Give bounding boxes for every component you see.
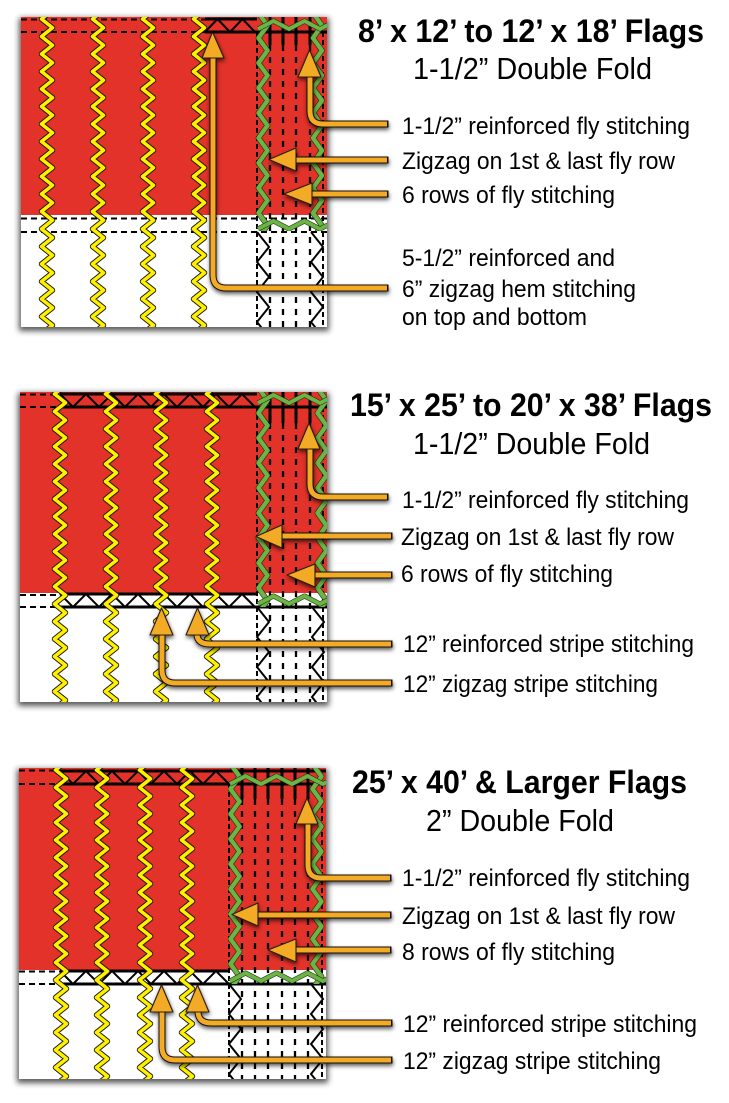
flag diagram 1 [14, 14, 334, 336]
arrow: hem stitching [202, 32, 387, 288]
arrow: reinforced fly stitching [296, 798, 390, 878]
subtitle: 2” Double Fold [426, 803, 614, 838]
label: 1-1/2” reinforced fly stitching [402, 865, 690, 892]
arrow: zigzag on first and last fly row [256, 525, 391, 548]
panel: 8 x 12 to 12 x 18 flags [19, 2, 704, 352]
arrow: zigzag stripe stitching [150, 985, 391, 1060]
label: hem stitching [402, 245, 636, 331]
arrow: zigzag on first and last fly row [269, 148, 387, 171]
label: 1-1/2” reinforced fly stitching [402, 113, 690, 140]
subtitle: 1-1/2” Double Fold [413, 426, 650, 461]
arrow: reinforced stripe stitching [186, 985, 391, 1023]
subtitle: 1-1/2” Double Fold [413, 51, 652, 86]
label: 1-1/2” reinforced fly stitching [402, 487, 689, 514]
title: 25’ x 40’ & Larger Flags [352, 764, 687, 800]
label: 8 rows of fly stitching [402, 939, 615, 966]
arrow: zigzag stripe stitching [150, 608, 391, 683]
flag diagram 2 [14, 388, 334, 710]
label: 6 rows of fly stitching [402, 182, 615, 209]
label: hem stitching: 6” zigzag hem stitching [402, 276, 636, 303]
label: 12” zigzag stripe stitching [403, 1048, 661, 1075]
arrow: reinforced stripe stitching [186, 608, 391, 644]
arrow: rows of fly stitching [287, 564, 391, 587]
arrow: rows of fly stitching [284, 183, 387, 205]
panel: 25 x 40 and larger flags [17, 752, 697, 1102]
label: Zigzag on 1st & last fly row [402, 148, 676, 175]
title: 15’ x 25’ to 20’ x 38’ Flags [350, 387, 712, 423]
label: Zigzag on 1st & last fly row [401, 524, 675, 551]
arrow: zigzag on first and last fly row [232, 903, 390, 926]
label: Zigzag on 1st & last fly row [402, 903, 676, 930]
label: hem stitching: 5-1/2” reinforced and [402, 245, 615, 272]
label: 6 rows of fly stitching [401, 561, 613, 588]
label: 12” reinforced stripe stitching [403, 631, 694, 658]
label: 12” zigzag stripe stitching [403, 671, 658, 698]
panel: 15 x 25 to 20 x 38 flags [18, 376, 712, 726]
label: hem stitching: on top and bottom [402, 304, 587, 331]
arrow: reinforced fly stitching [298, 423, 387, 497]
arrow: reinforced fly stitching [298, 50, 387, 124]
label: 12” reinforced stripe stitching [403, 1011, 697, 1038]
arrow: rows of fly stitching [268, 939, 390, 962]
title: 8’ x 12’ to 12’ x 18’ Flags [358, 13, 704, 49]
flag diagram 3 [17, 752, 338, 1102]
